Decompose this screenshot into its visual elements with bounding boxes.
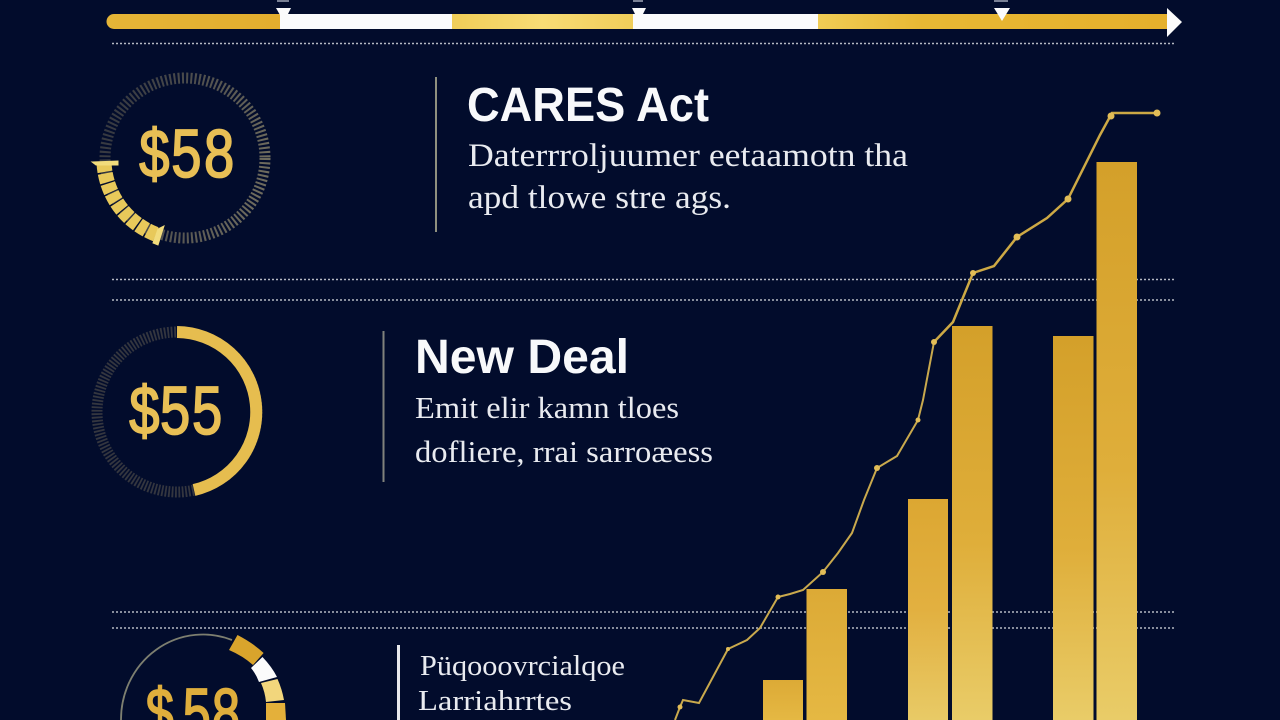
bar 5 bbox=[1053, 336, 1094, 720]
heading: CARES Act: CARES Act bbox=[467, 79, 709, 132]
timeline marker 3 bbox=[994, 8, 1010, 21]
gauge: $58 CARES Act bbox=[92, 78, 265, 245]
gauge: $55 New Deal bbox=[97, 332, 257, 492]
text block: third item bbox=[418, 651, 625, 717]
trend line markers bbox=[678, 110, 1160, 710]
gauge value: $55 bbox=[129, 373, 222, 449]
description: New Deal: Emit elir kamn tloes bbox=[415, 390, 679, 425]
gauge arc caps bbox=[92, 161, 164, 245]
bar 6 bbox=[1096, 162, 1137, 720]
bar 3 bbox=[908, 499, 948, 720]
trend line upper section bbox=[934, 113, 1157, 342]
text block: third item: Püqooovrcialqoe bbox=[420, 651, 625, 682]
divider: third item bbox=[397, 645, 400, 720]
description: New Deal bbox=[415, 390, 713, 469]
bar 4 bbox=[952, 326, 992, 720]
gauge progress arc bbox=[104, 163, 158, 235]
heading: New Deal: New Deal bbox=[415, 331, 629, 384]
timeline bar bbox=[107, 8, 1182, 37]
description: New Deal: dofliere, rrai sarroæess bbox=[415, 434, 713, 469]
timeline marker 1 bbox=[276, 8, 291, 22]
gauge progress arc bbox=[177, 332, 256, 490]
divider: CARES Act bbox=[435, 77, 437, 232]
bar 2 bbox=[806, 589, 847, 720]
gauge segment gold bbox=[229, 635, 264, 665]
timeline arrowhead bbox=[1167, 8, 1182, 37]
bar chart bbox=[763, 162, 1137, 720]
gauge segment pale bbox=[261, 679, 284, 702]
description: CARES Act: apd tlowe stre ags. bbox=[468, 180, 731, 216]
divider: New Deal bbox=[382, 331, 384, 482]
timeline marker 2 bbox=[632, 8, 646, 22]
text block: third item: Larriahrrtes bbox=[418, 686, 572, 717]
text block: New Deal bbox=[415, 331, 713, 469]
bar 1 bbox=[763, 680, 803, 720]
gauge value: $58 bbox=[139, 116, 234, 192]
description: CARES Act: Daterrroljuumer eetaamotn tha bbox=[468, 138, 908, 174]
gauge segment amber bbox=[266, 703, 286, 720]
trend line bbox=[675, 110, 1160, 720]
text block: CARES Act bbox=[467, 79, 908, 216]
description: CARES Act bbox=[468, 138, 908, 216]
gauge segment white bbox=[251, 657, 277, 682]
gauge: $58 third item bbox=[121, 635, 286, 720]
